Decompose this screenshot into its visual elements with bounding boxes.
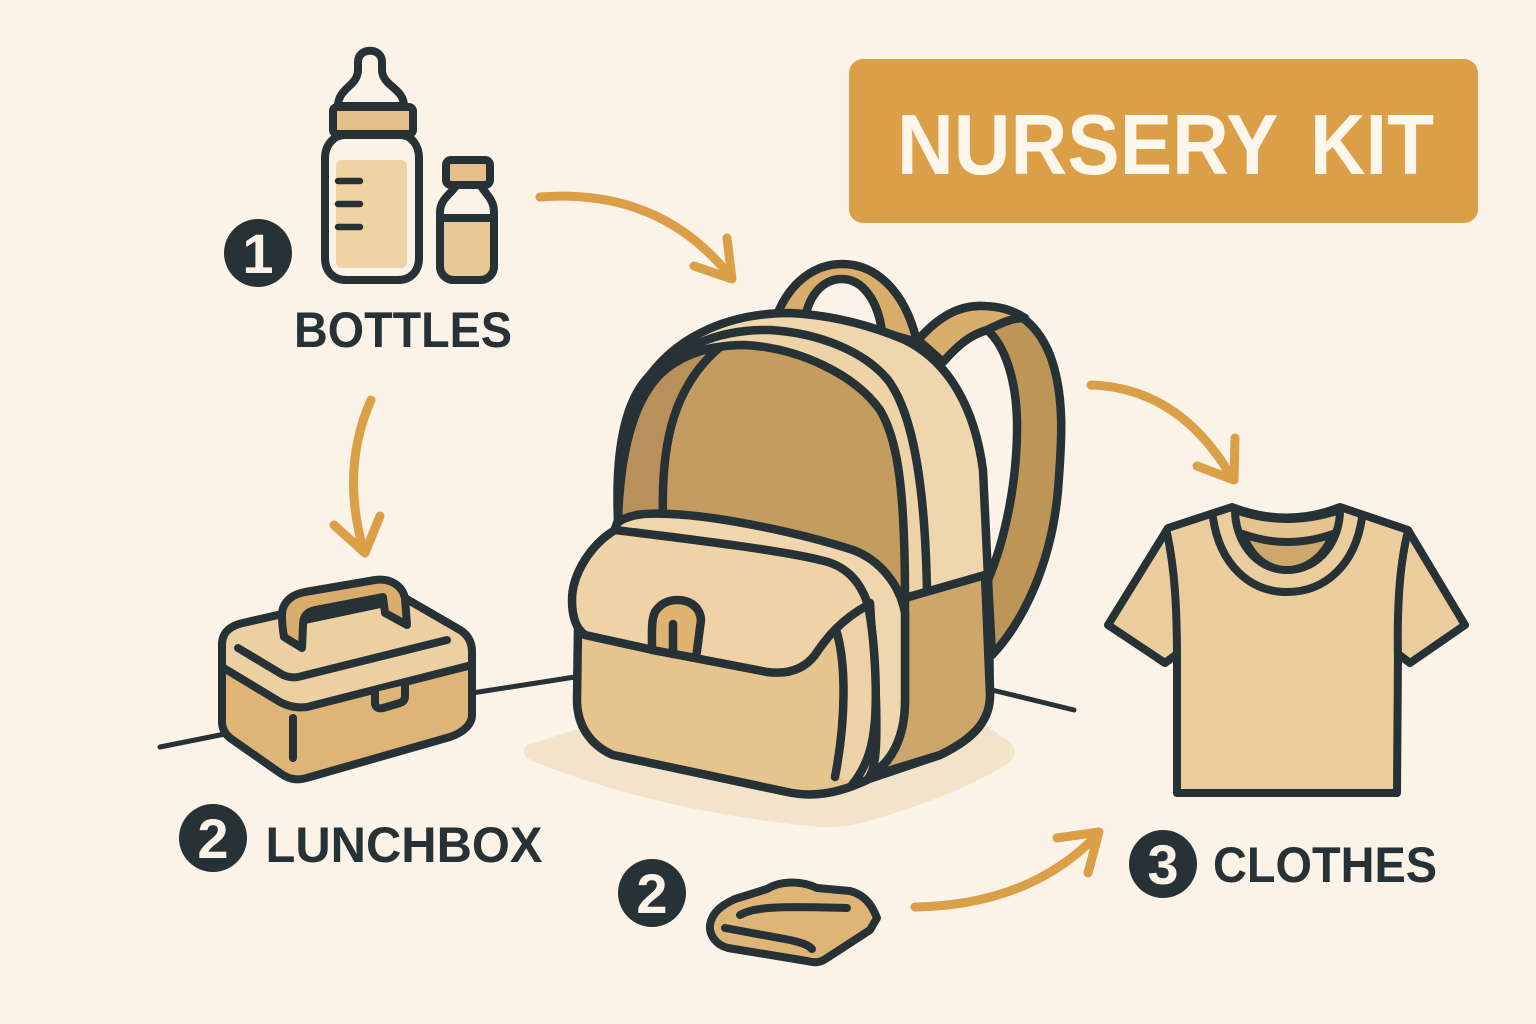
strap upper band — [918, 306, 1025, 362]
badge 2: pouch — [618, 859, 686, 927]
icon: lunchbox — [222, 580, 472, 779]
title text: KIT — [1310, 98, 1434, 193]
badge 1 — [224, 219, 292, 287]
icon: folded pouch — [710, 882, 877, 962]
badge 1: 1 — [242, 222, 274, 285]
icon: backpack — [572, 264, 1061, 794]
arrow: pouch to clothes — [915, 832, 1099, 907]
title text: NURSERY — [897, 98, 1278, 193]
lower pocket — [577, 600, 876, 794]
badge 2: lunchbox — [179, 804, 247, 872]
pocket side strip — [835, 603, 875, 782]
large bottle milk — [336, 160, 407, 268]
badge 2: pouch: 2 — [636, 862, 668, 925]
shoulder strap — [918, 306, 1061, 655]
shirt collar — [1213, 518, 1362, 592]
ground line — [160, 677, 1074, 747]
arrow: backpack to clothes — [1091, 385, 1235, 480]
box base — [222, 592, 472, 779]
title banner — [849, 59, 1478, 223]
arrow: bottles to backpack — [540, 196, 732, 279]
buckle — [652, 600, 701, 658]
icon: bottles — [325, 51, 494, 280]
pocket fold lines — [835, 605, 876, 785]
badge 3 — [1129, 830, 1197, 898]
icon: t-shirt — [1108, 507, 1465, 793]
shirt body — [1108, 507, 1465, 793]
bottle collar — [333, 107, 413, 134]
small bottle body — [440, 184, 494, 280]
neck interior — [1235, 510, 1340, 570]
handle — [282, 580, 407, 648]
label: lunchbox: LUNCHBOX — [266, 817, 542, 873]
lid groove — [238, 640, 447, 677]
top handle — [777, 264, 917, 342]
pocket trim — [590, 514, 905, 778]
main zip trim — [622, 330, 927, 600]
nipple — [338, 51, 404, 106]
label: clothes: CLOTHES — [1213, 837, 1437, 893]
small bottle cap — [446, 160, 490, 185]
large bottle body — [325, 135, 419, 280]
badge 3: 3 — [1147, 833, 1179, 896]
backpack shadow — [524, 725, 1015, 827]
label: bottles: BOTTLES — [294, 302, 512, 358]
side seam — [289, 718, 297, 758]
body shell — [617, 313, 990, 782]
box lid — [222, 592, 472, 707]
badge 2: lunchbox: 2 — [197, 807, 229, 870]
small bottle liquid — [440, 218, 494, 280]
clasp — [375, 685, 405, 708]
pocket flap — [572, 530, 868, 673]
measure ticks — [338, 181, 360, 227]
side panel — [868, 575, 990, 777]
sleeve seams — [1167, 533, 1407, 660]
arrow: bottles to lunchbox — [334, 400, 380, 553]
interior — [618, 345, 905, 600]
interior left wedge — [618, 347, 720, 520]
